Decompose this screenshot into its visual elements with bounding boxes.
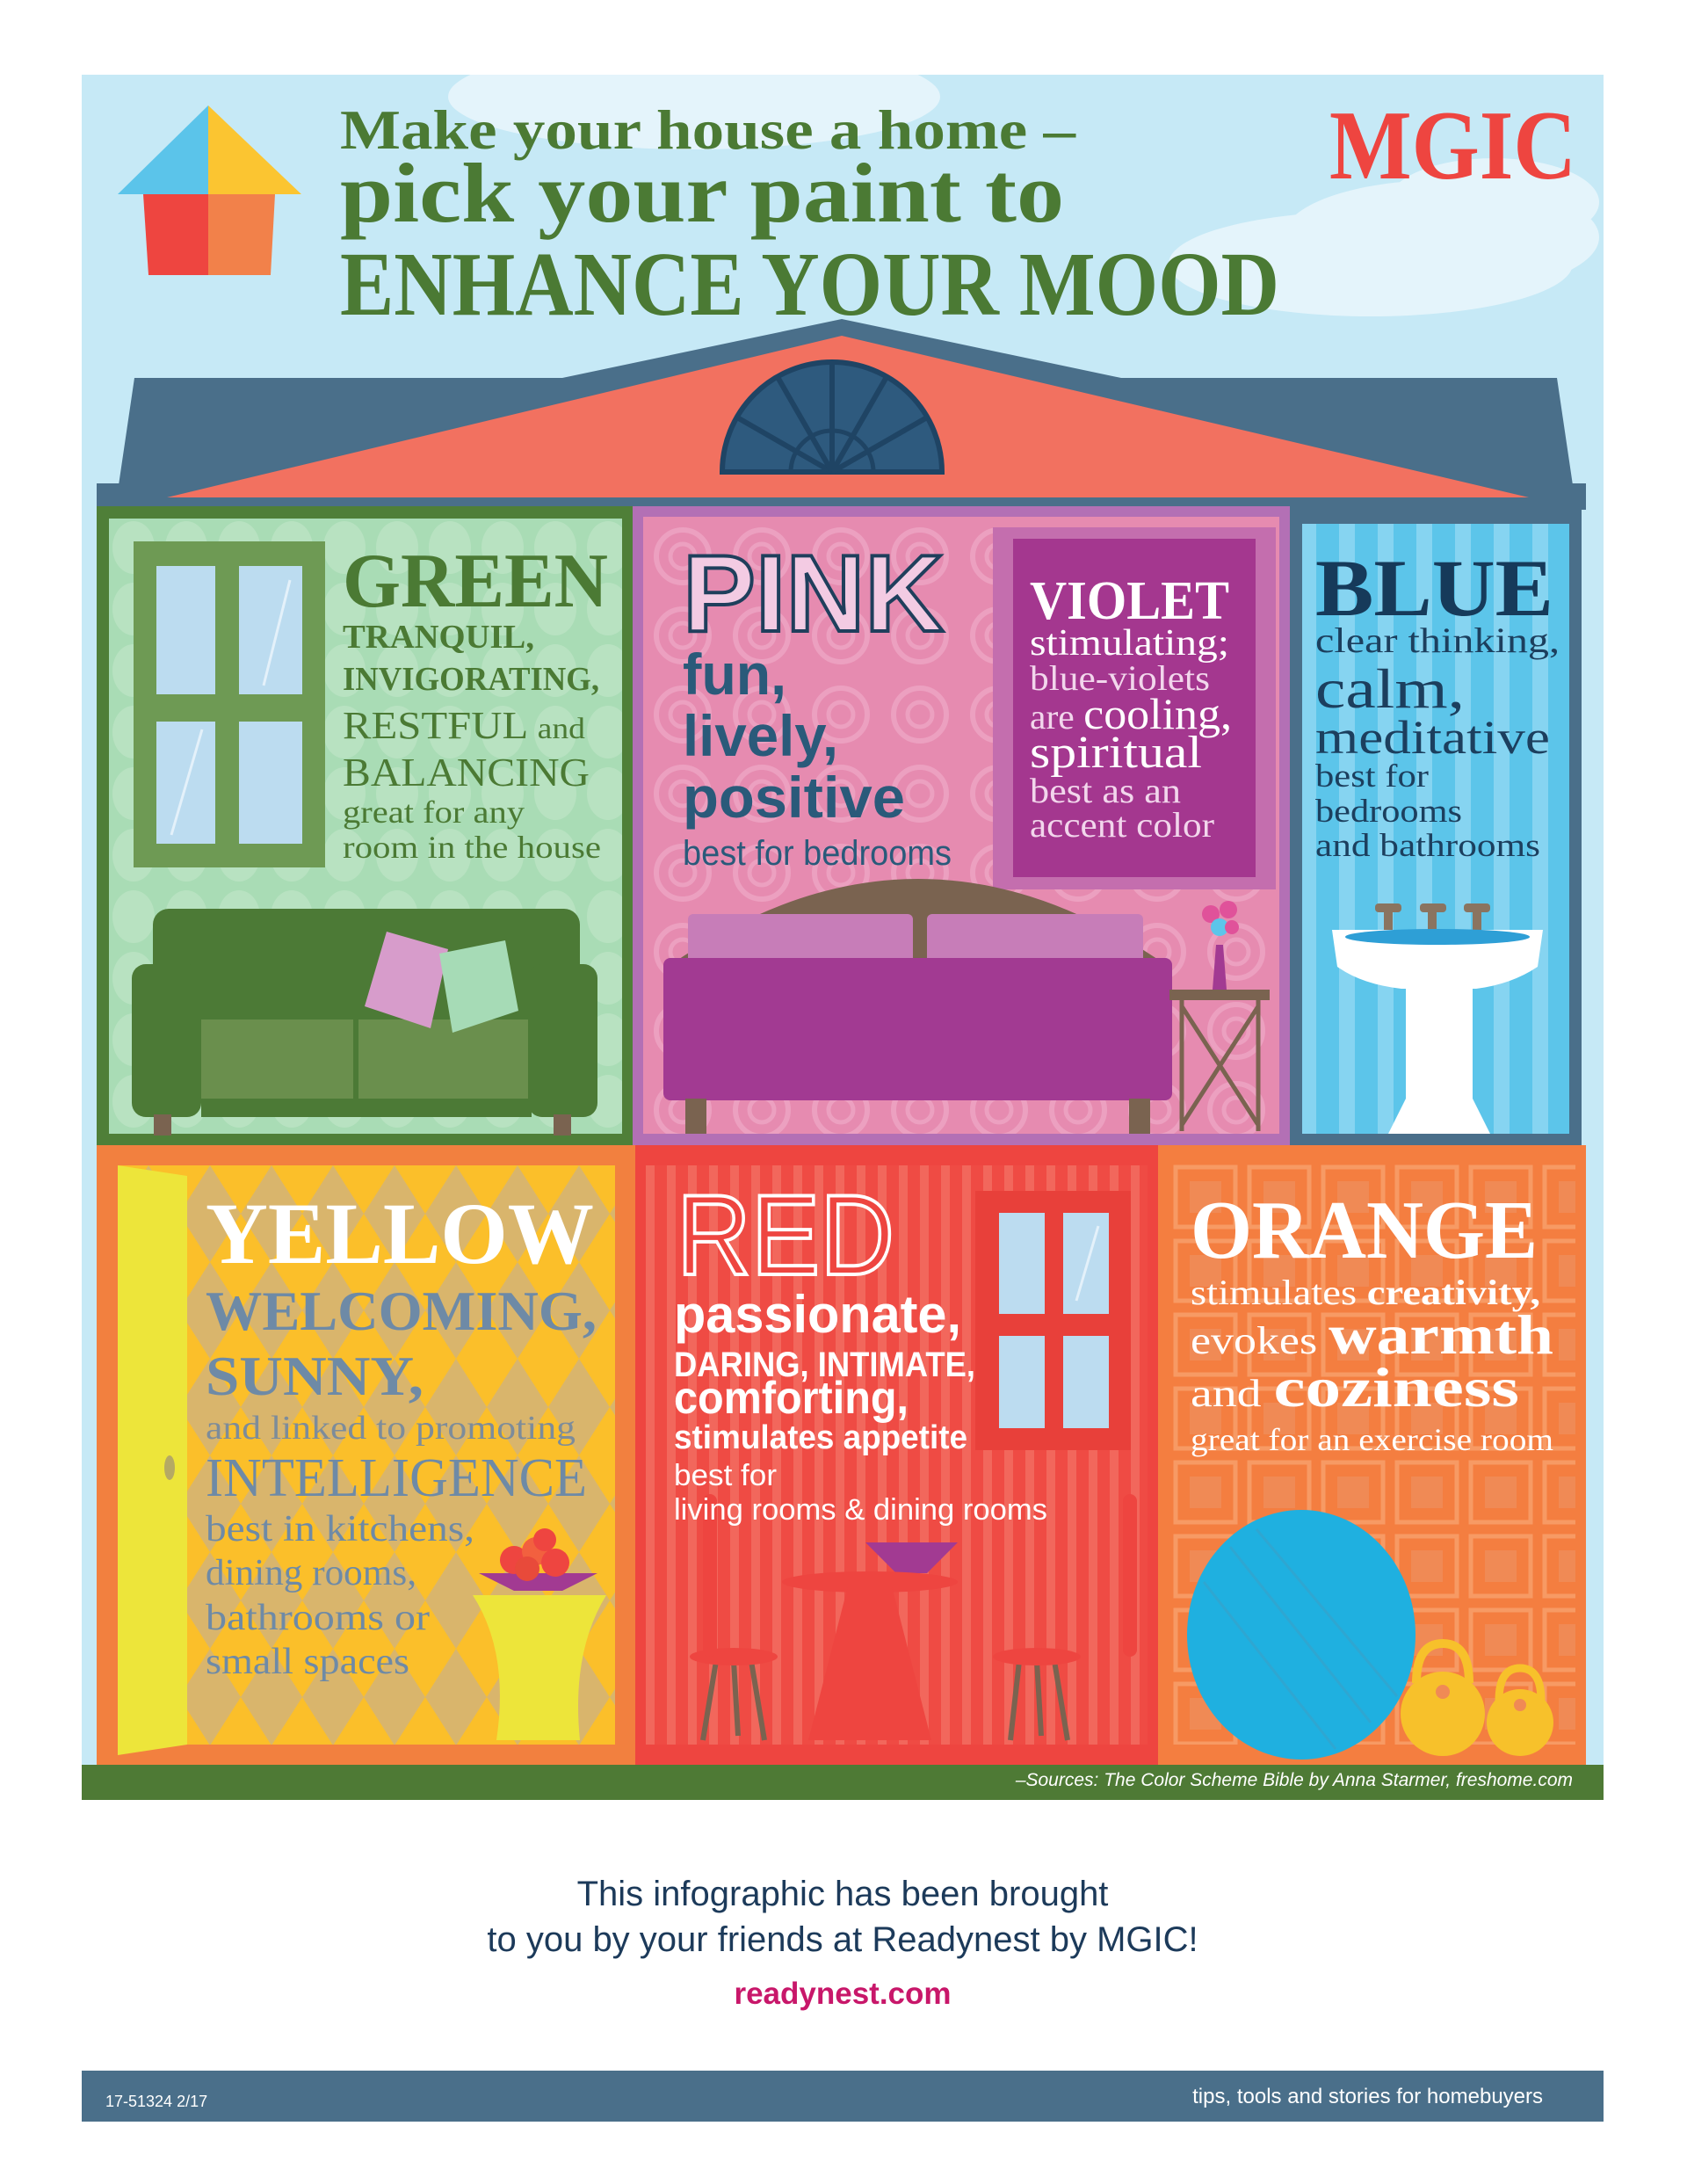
panel: violet box: stimulating; [1030,623,1229,664]
panel: blue room [1290,506,1582,1145]
icon: table and chairs [690,1494,1137,1740]
text: pink [683,533,952,873]
text: yellow: YELLOW [206,1185,594,1282]
logo: MGIC: MGIC [1329,91,1576,200]
text: red: best for [674,1459,777,1492]
panel: violet box: blue-violets [1030,658,1210,698]
roof [97,319,1586,510]
text: yellow: best in kitchens, [206,1509,474,1549]
text: yellow: dining rooms, [206,1553,416,1593]
text: pink: best for bedrooms [683,834,952,873]
text: green: room in the house [343,830,601,865]
panel: red room [635,1145,1158,1765]
icon: stool with fruit [473,1528,606,1740]
text: blue: clear thinking, [1315,620,1560,660]
bottom bar: 17-51324 2/17 [105,2093,207,2110]
text: yellow: WELCOMING, [206,1280,597,1342]
clouds [448,75,1599,316]
text: red: passionate, [674,1285,961,1344]
sky background [82,75,1604,1765]
text: red: comforting, [674,1373,909,1424]
panel: violet box: accent color [1030,805,1214,845]
text: red: living rooms & dining rooms [674,1493,1047,1527]
title: ENHANCE YOUR MOOD [340,234,1279,335]
footer text: This infographic has been brought [577,1875,1108,1913]
bottom bar: tips, tools and stories for homebuyers [1192,2085,1543,2108]
text: red: DARING, INTIMATE, [674,1346,975,1384]
panel: pink room [633,506,1290,1145]
title: Make your house a home – [340,98,1076,161]
text: blue: bedrooms [1315,794,1462,830]
text: green: TRANQUIL, [343,619,534,656]
bottom bar [82,2071,1604,2122]
icon: sink [1332,903,1543,1134]
icon: side table with flowers [1169,901,1270,1131]
text: blue: calm, [1315,657,1465,720]
panel: violet box: best as an [1030,771,1181,810]
text: orange: stimulates creativity, [1191,1273,1540,1312]
title: pick your paint to [340,146,1064,240]
icon: house logo [118,105,301,275]
text: yellow: and linked to promoting [206,1410,576,1447]
title [340,98,1279,335]
icon: exercise ball and kettlebells [1187,1510,1553,1760]
text: orange: ORANGE [1191,1185,1538,1276]
text: orange: great for an exercise room [1191,1422,1553,1457]
text: green: INVIGORATING, [343,661,599,698]
icon: window [134,541,325,867]
icon: window [975,1191,1131,1450]
sources: –Sources: The Color Scheme Bible by Anna Starmer, freshome.com [1015,1770,1573,1790]
text: yellow: small spaces [206,1642,409,1682]
text: blue: meditative [1315,711,1550,764]
text: pink: positive [683,765,905,830]
panel: violet box: spiritual [1030,728,1202,778]
text: yellow: INTELLIGENCE [206,1448,587,1508]
icon: sofa [132,909,597,1136]
text: blue: best for [1315,758,1429,795]
text: green: BALANCING [343,750,590,795]
icon: door [118,1165,187,1755]
icon: fan window [722,362,942,472]
text: red [674,1171,1047,1527]
text: pink: PINK [683,533,944,655]
ground strip [82,1765,1604,1800]
text: blue [1315,543,1560,864]
text: yellow: bathrooms or [206,1598,430,1638]
icon: bed [663,879,1172,1134]
text: green: GREEN [343,539,608,624]
panel: violet box: VIOLET [1030,571,1229,631]
text: red: stimulates appetite [674,1419,967,1456]
text: green: RESTFUL and [343,704,585,747]
panel: violet box [993,527,1276,889]
footer text [487,1875,1198,2011]
text: blue: and bathrooms [1315,828,1540,864]
panel: orange room [1158,1145,1586,1765]
text: red: RED [677,1171,894,1299]
text: green [343,539,608,865]
text: orange [1191,1185,1553,1457]
text: pink: fun, [683,642,786,707]
footer text: readynest.com [734,1977,952,2011]
text: pink: lively, [683,703,838,768]
text: yellow [206,1185,597,1682]
footer text: to you by your friends at Readynest by MGIC! [487,1920,1198,1959]
panel: yellow room [97,1145,635,1765]
text: orange: and coziness [1191,1356,1519,1419]
text: orange: evokes warmth [1191,1303,1553,1366]
text: green: great for any [343,795,525,830]
text: blue: BLUE [1315,543,1553,633]
panel: green room [97,506,633,1145]
panel: violet box: are cooling, [1030,689,1232,738]
text: yellow: SUNNY, [206,1345,424,1407]
